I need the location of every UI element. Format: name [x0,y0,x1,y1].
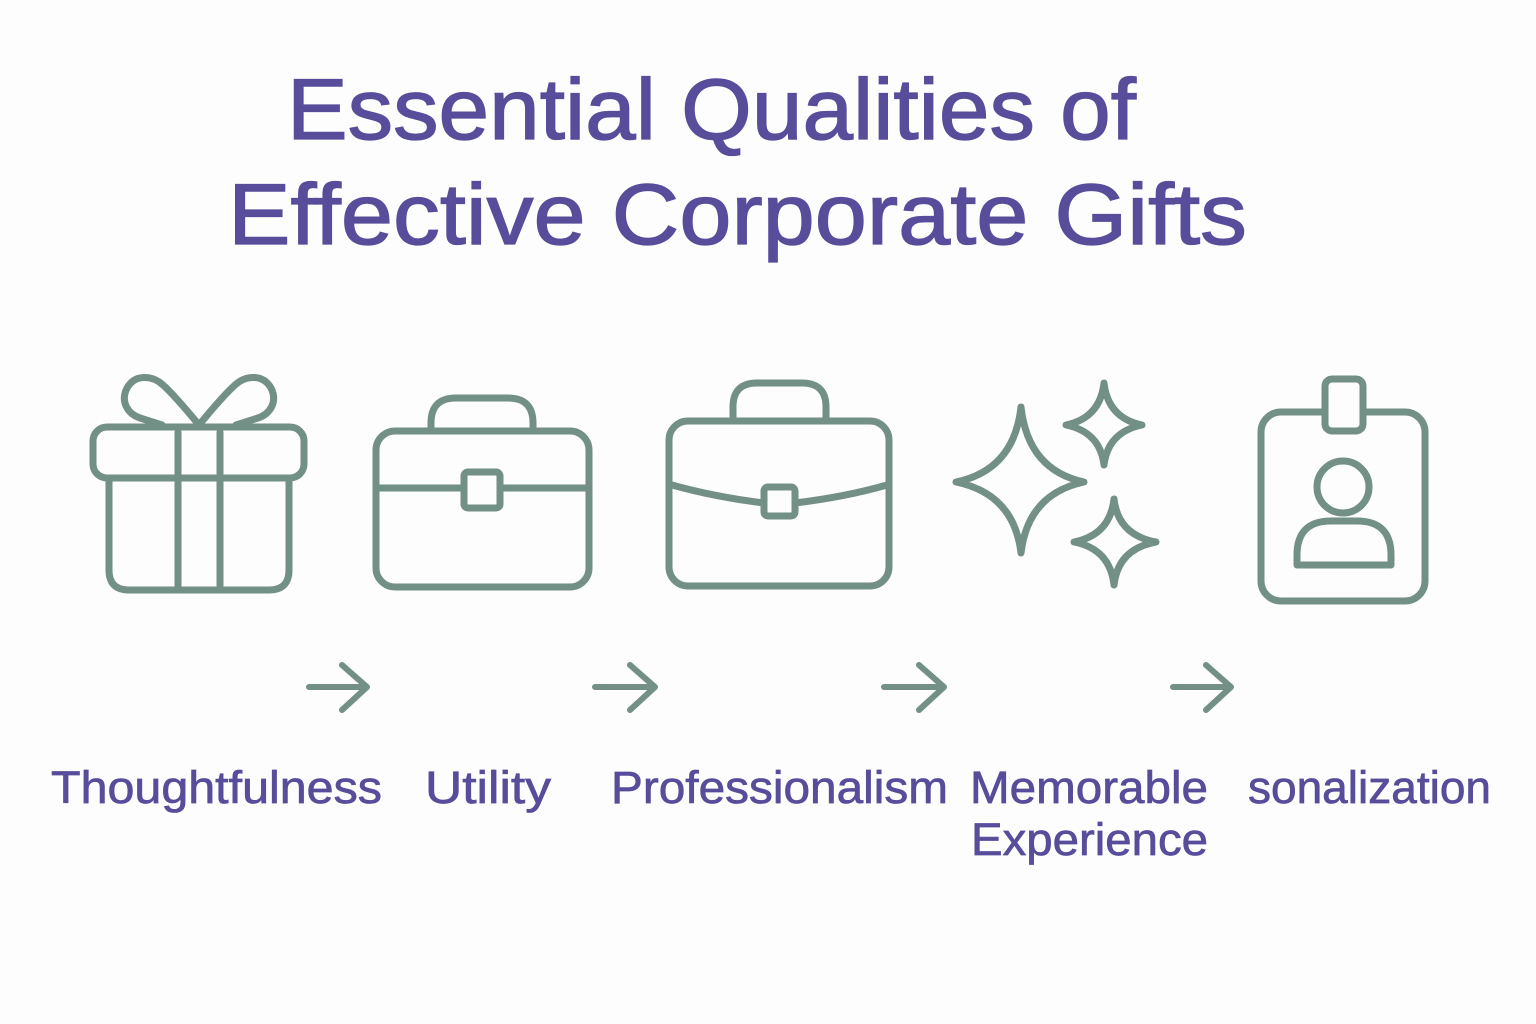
label: Thoughtfulness: Thoughtfulness [51,762,382,813]
icon: gift box [93,377,304,590]
arrow 4 [1173,665,1231,710]
label: sonalization: sonalization [1248,762,1491,813]
label: Memorable Experience [970,762,1208,865]
icon: sparkles [956,383,1156,585]
title [228,62,1247,263]
title: Essential Qualities of [287,62,1137,158]
arrow 1 [309,665,367,710]
arrow 2 [595,665,655,710]
icon: toolbox [376,398,589,587]
label: Memorable Experience: Experience [971,814,1208,865]
title: Effective Corporate Gifts [228,167,1247,263]
icon: ID badge [1261,379,1425,601]
label: Memorable Experience: Memorable [970,762,1208,813]
label: Professionalism: Professionalism [611,762,948,813]
label: Utility: Utility [425,762,552,813]
arrow 3 [884,665,944,710]
icon: briefcase [669,383,889,586]
